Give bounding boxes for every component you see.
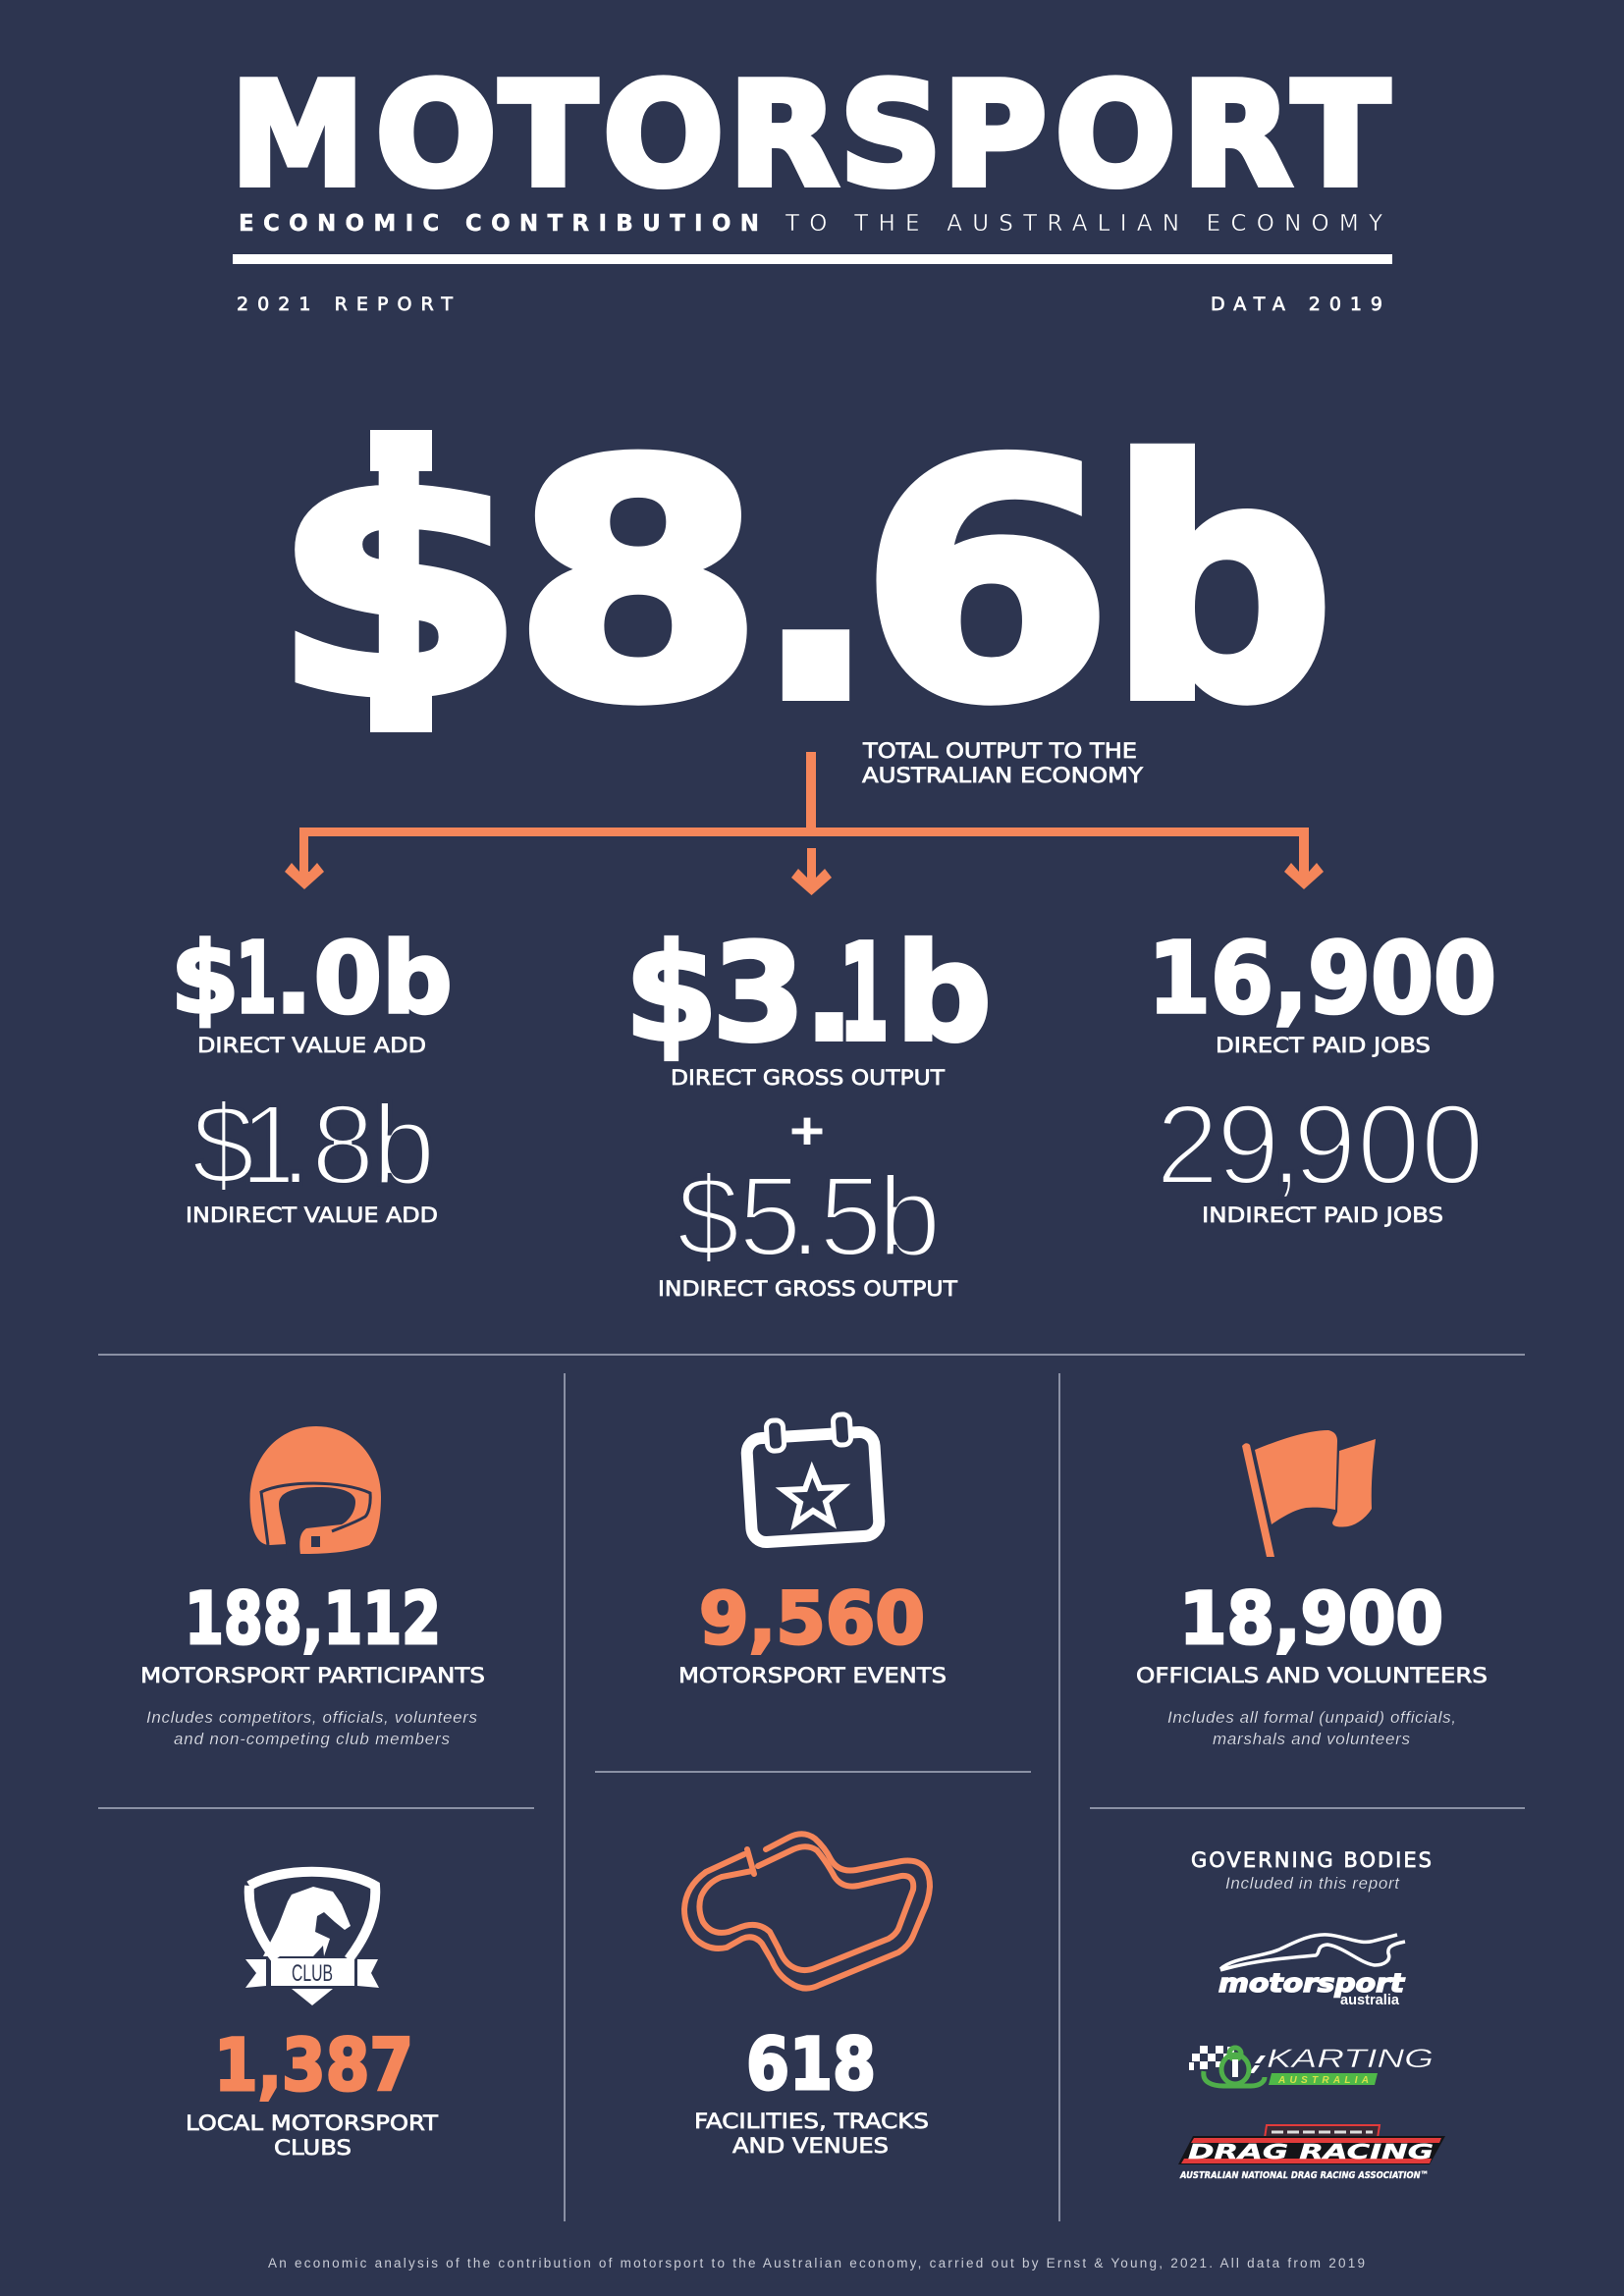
- direct gross output figure: b: [895, 916, 992, 1072]
- title: OTORSPORT: [375, 53, 1389, 218]
- logo: drag racing: DRAG RACING: [1188, 2140, 1434, 2163]
- footer note: An economic analysis of the contribution of motorsport to the Australian economy, carried out by Ernst & Young, 2021. All data from 2019: [268, 2256, 1365, 2270]
- facilities label: [694, 2109, 929, 2158]
- panel: participants: [140, 1426, 485, 1748]
- headline figure: [272, 395, 1334, 774]
- direct value add figure: 1: [236, 921, 277, 1036]
- panel: facilities: [684, 1834, 930, 2158]
- facilities label: FACILITIES, TRACKS: [694, 2109, 929, 2133]
- icon: club shield: [245, 1872, 379, 2005]
- direct gross output figure: $3.: [624, 916, 855, 1072]
- direct value add figure: $: [171, 921, 240, 1036]
- title: M: [231, 53, 364, 218]
- column: gross output: [624, 916, 992, 1301]
- indirect jobs figure: 29,900: [1156, 1081, 1485, 1208]
- governing bodies subheading: Included in this report: [1225, 1874, 1400, 1893]
- headline figure: .: [754, 395, 878, 774]
- icon: calendar with star: [746, 1414, 880, 1543]
- icon: flag: [1242, 1430, 1376, 1557]
- club ribbon text: CLUB: [292, 1960, 333, 1987]
- direct gross output label: DIRECT GROSS OUTPUT: [671, 1066, 945, 1090]
- direct value add label: DIRECT VALUE ADD: [197, 1034, 426, 1057]
- logo: karting australia: [1189, 2044, 1434, 2086]
- logo: motorsport australia: [1218, 1935, 1406, 2008]
- logo: drag racing: [1178, 2125, 1445, 2181]
- governing bodies heading: GOVERNING BODIES: [1191, 1848, 1432, 1872]
- officials figure: 18,900: [1179, 1577, 1443, 1661]
- direct jobs figure: 16,900: [1148, 921, 1496, 1036]
- officials note: marshals and volunteers: [1213, 1730, 1410, 1748]
- direct jobs label: DIRECT PAID JOBS: [1216, 1034, 1431, 1057]
- officials note: Includes all formal (unpaid) officials,: [1167, 1708, 1456, 1727]
- facilities figure: 618: [746, 2023, 876, 2107]
- headline figure: b: [1109, 395, 1334, 774]
- headline figure: 6: [859, 395, 1113, 774]
- clubs label: CLUBS: [274, 2136, 352, 2160]
- header rule: [233, 254, 1392, 264]
- participants figure: 188,112: [185, 1577, 441, 1661]
- logo: motorsport australia: australia: [1340, 1992, 1400, 2008]
- logo: drag racing: AUSTRALIAN NATIONAL DRAG RACING ASSOCIATION™: [1179, 2170, 1429, 2181]
- indirect jobs label: INDIRECT PAID JOBS: [1202, 1203, 1443, 1227]
- clubs figure: 1,387: [214, 2024, 413, 2108]
- icon: helmet: [249, 1426, 381, 1555]
- direct gross output figure: [624, 916, 992, 1072]
- logo: karting australia: KARTING: [1267, 2044, 1434, 2073]
- icon: race track: [684, 1834, 930, 1989]
- logo: karting australia: AUSTRALIA: [1277, 2075, 1369, 2086]
- panel: events: [678, 1414, 947, 1687]
- plus sign: +: [789, 1101, 825, 1160]
- clubs label: LOCAL MOTORSPORT: [186, 2111, 438, 2135]
- direct gross output figure: 1: [839, 916, 890, 1072]
- report year: 2021 REPORT: [237, 294, 453, 315]
- participants note: and non-competing club members: [174, 1730, 450, 1748]
- direct value add figure: [171, 921, 453, 1036]
- officials label: OFFICIALS AND VOLUNTEERS: [1136, 1664, 1488, 1687]
- subtitle light: TO THE AUSTRALIAN ECONOMY: [785, 211, 1383, 237]
- panel: officials and volunteers: [1136, 1430, 1488, 1748]
- subtitle bold: ECONOMIC CONTRIBUTION: [239, 211, 759, 237]
- column: value add: [171, 921, 453, 1227]
- panel: local clubs: [186, 1872, 438, 2160]
- headline caption: AUSTRALIAN ECONOMY: [862, 764, 1143, 787]
- logo: motorsport australia: motorsport: [1218, 1969, 1406, 1999]
- headline caption: TOTAL OUTPUT TO THE: [862, 739, 1137, 763]
- direct value add figure: .0b: [275, 921, 453, 1036]
- header: [231, 53, 1392, 315]
- indirect gross output label: INDIRECT GROSS OUTPUT: [658, 1277, 957, 1301]
- column: jobs: [1148, 921, 1496, 1227]
- clubs label: [186, 2111, 438, 2160]
- indirect value add label: INDIRECT VALUE ADD: [186, 1203, 438, 1227]
- officials note: [1167, 1708, 1456, 1748]
- events figure: 9,560: [699, 1577, 925, 1661]
- events label: MOTORSPORT EVENTS: [678, 1664, 947, 1687]
- indirect value add figure: $1.8b: [191, 1081, 436, 1208]
- indirect gross output figure: $5.5b: [677, 1152, 942, 1280]
- arrows: tree from total to three columns: [285, 752, 1324, 895]
- participants note: [146, 1708, 477, 1748]
- participants note: Includes competitors, officials, volunteers: [146, 1708, 477, 1727]
- headline figure: $: [272, 402, 525, 768]
- data year: DATA 2019: [1211, 294, 1382, 315]
- facilities label: AND VENUES: [732, 2134, 889, 2158]
- participants label: MOTORSPORT PARTICIPANTS: [140, 1664, 485, 1687]
- panel: governing bodies: [1178, 1848, 1445, 2181]
- headline figure: 8: [513, 395, 764, 774]
- headline caption: [862, 739, 1143, 787]
